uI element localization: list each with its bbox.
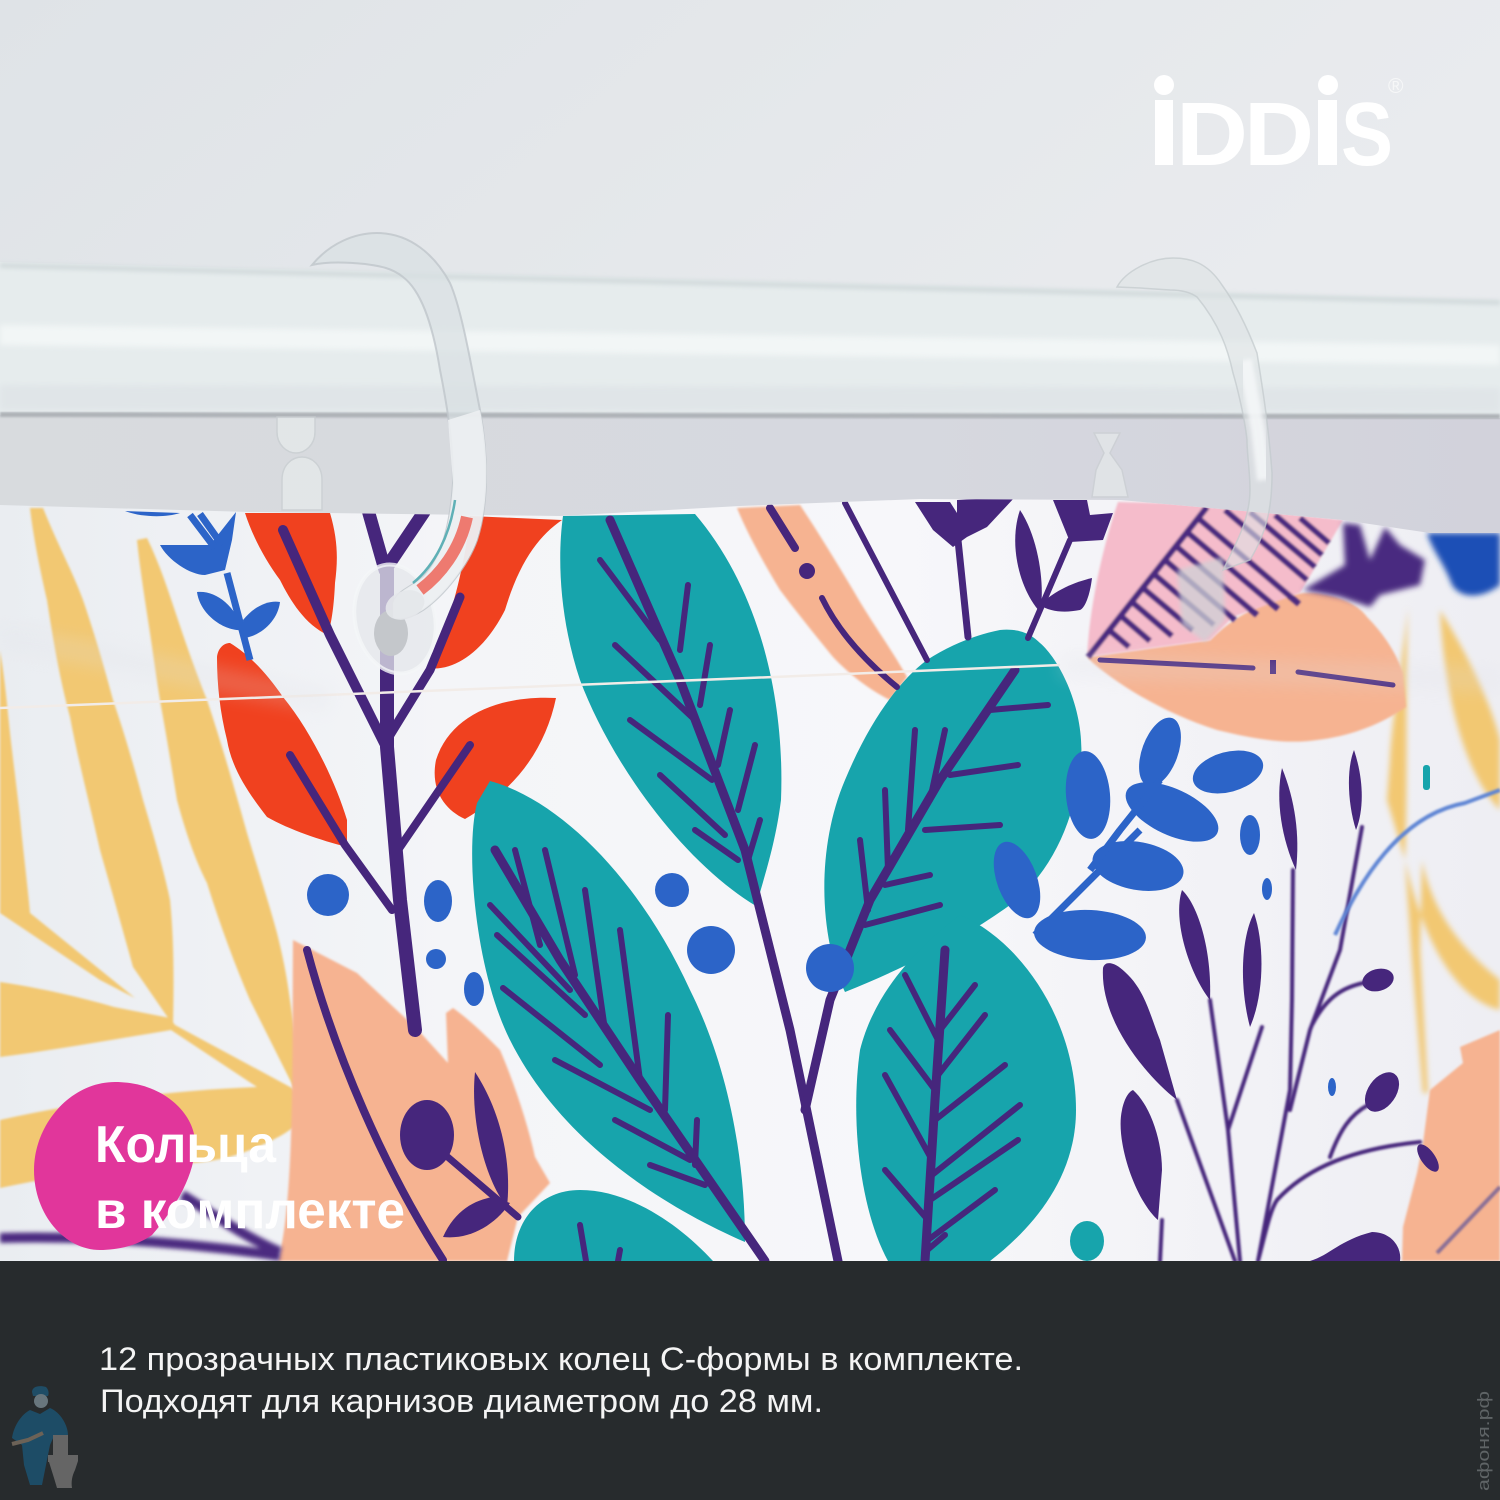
badge heading: Кольца [95, 1116, 277, 1174]
logo: IDDIS [1154, 75, 1404, 185]
clear ring hook tips [277, 417, 1128, 510]
dark blue corner flower [1427, 533, 1500, 596]
red leaves [217, 513, 562, 847]
teal leaves [472, 514, 1430, 1261]
curtain rod [0, 262, 1500, 419]
plastic ring left [312, 233, 486, 681]
curtain seam [0, 665, 1060, 708]
curtain fabric with floral pattern [0, 490, 1500, 1270]
watermark: афоня.рф [1474, 1391, 1493, 1491]
logo: IDDIS: D [1176, 85, 1248, 185]
badge heading: в комплекте [95, 1182, 405, 1240]
pink badge [34, 1082, 195, 1250]
wall background [0, 0, 1500, 560]
logo: IDDIS: ® [1388, 75, 1404, 98]
yellow fronds right [1387, 608, 1500, 1093]
purple stems: main veins [283, 503, 1393, 1261]
description text: Подходят для карнизов диаметром до 28 мм. [100, 1383, 823, 1419]
plastic ring right [1117, 258, 1272, 642]
purple sprig leaves [400, 497, 1443, 1261]
icon: plumber with toilet [12, 1386, 78, 1488]
peach leaves [278, 505, 1500, 1261]
blue sprigs and flowers [125, 511, 1336, 1096]
description text [99, 1341, 1023, 1419]
logo: IDDIS: S [1341, 85, 1393, 185]
description text: 12 прозрачных пластиковых колец С-формы в комплекте. [99, 1341, 1023, 1377]
blurred purple branch under badge [0, 1195, 280, 1256]
dark footer panel [0, 1261, 1500, 1500]
yellow fronds left [0, 508, 303, 1188]
pink hatched leaf [1087, 502, 1343, 657]
badge heading [95, 1116, 405, 1240]
dark purple cluster [1303, 523, 1425, 607]
logo: IDDIS: D [1244, 85, 1314, 185]
plum stems right [1160, 827, 1420, 1261]
purple veins: teal leaf side veins [490, 560, 1048, 1261]
